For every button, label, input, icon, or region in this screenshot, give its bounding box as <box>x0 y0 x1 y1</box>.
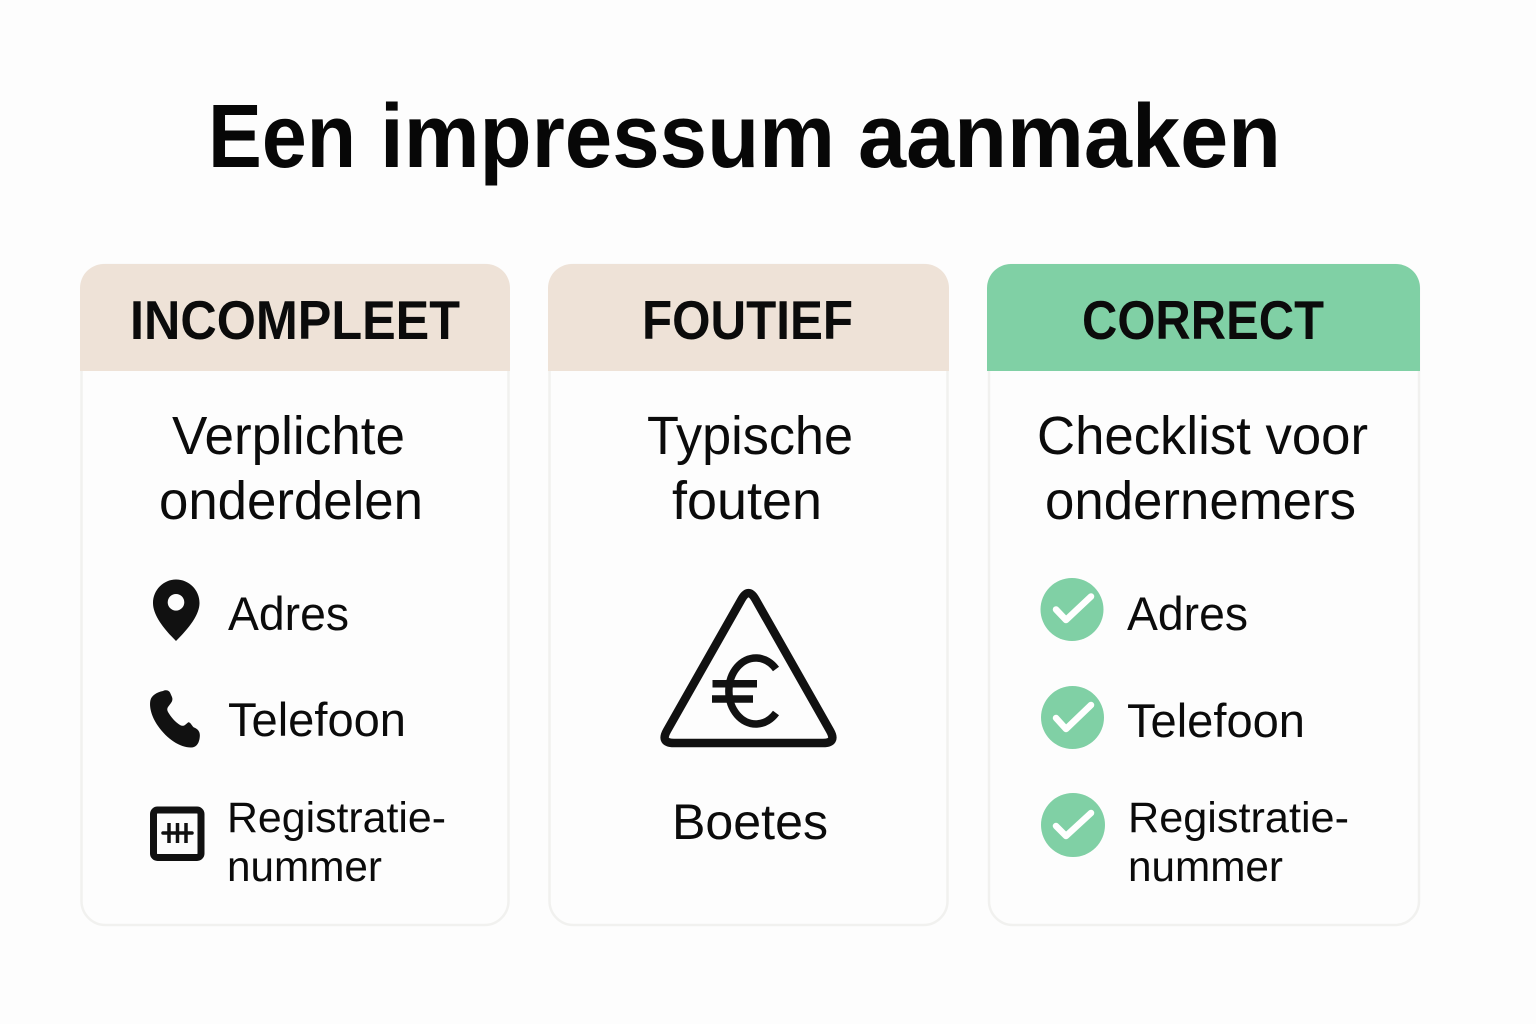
subheading: checklist voor ondernemers: Checklist voor <box>1037 406 1368 466</box>
label: registratienummer <box>1128 794 1349 891</box>
panel: incompleet <box>80 264 510 925</box>
icon: phone <box>150 690 200 748</box>
header band: foutief <box>548 264 949 371</box>
subheading: typische fouten <box>647 406 853 531</box>
icon: check registratienummer <box>1041 793 1105 857</box>
icon: check telefoon <box>1041 686 1104 749</box>
header band: incompleet <box>80 264 510 371</box>
label: telefoon: Telefoon <box>1127 694 1305 747</box>
label: adres: Adres <box>1127 587 1248 640</box>
subheading: verplichte onderdelen: onderdelen <box>159 471 423 531</box>
subheading: checklist voor ondernemers: ondernemers <box>1045 471 1356 531</box>
label: registratienummer: nummer <box>1128 843 1283 891</box>
label: registratienummer: Registratie- <box>1128 794 1349 842</box>
card background: incompleet <box>82 265 508 925</box>
panel: foutief <box>548 264 949 925</box>
label: registratienummer <box>227 794 446 891</box>
title <box>208 87 1281 187</box>
icon: registration number <box>154 810 201 858</box>
header band: correct <box>987 264 1420 371</box>
heading: foutief: FOUTIEF <box>642 289 853 351</box>
label: registratienummer: Registratie- <box>227 794 446 842</box>
title: aanmaken <box>858 87 1281 187</box>
icon: warning triangle with euro <box>665 593 832 743</box>
subheading: typische fouten: fouten <box>672 471 822 531</box>
subheading: typische fouten: Typische <box>647 406 853 466</box>
label: registratienummer: nummer <box>227 843 382 891</box>
subheading: verplichte onderdelen: Verplichte <box>172 406 405 466</box>
subheading: checklist voor ondernemers <box>1037 406 1368 531</box>
panel: correct <box>987 264 1420 925</box>
label: telefoon: Telefoon <box>228 693 406 746</box>
label: adres: Adres <box>228 587 349 640</box>
card background: foutief <box>550 265 948 925</box>
title: impressum <box>380 87 835 187</box>
heading: incompleet: INCOMPLEET <box>130 289 460 351</box>
label: boetes: Boetes <box>672 794 828 850</box>
card background: correct <box>989 265 1419 925</box>
title: Een <box>208 87 356 187</box>
subheading: verplichte onderdelen <box>159 406 423 531</box>
icon: location pin <box>153 580 200 641</box>
icon: check adres <box>1040 578 1104 641</box>
heading: correct: CORRECT <box>1082 289 1324 351</box>
